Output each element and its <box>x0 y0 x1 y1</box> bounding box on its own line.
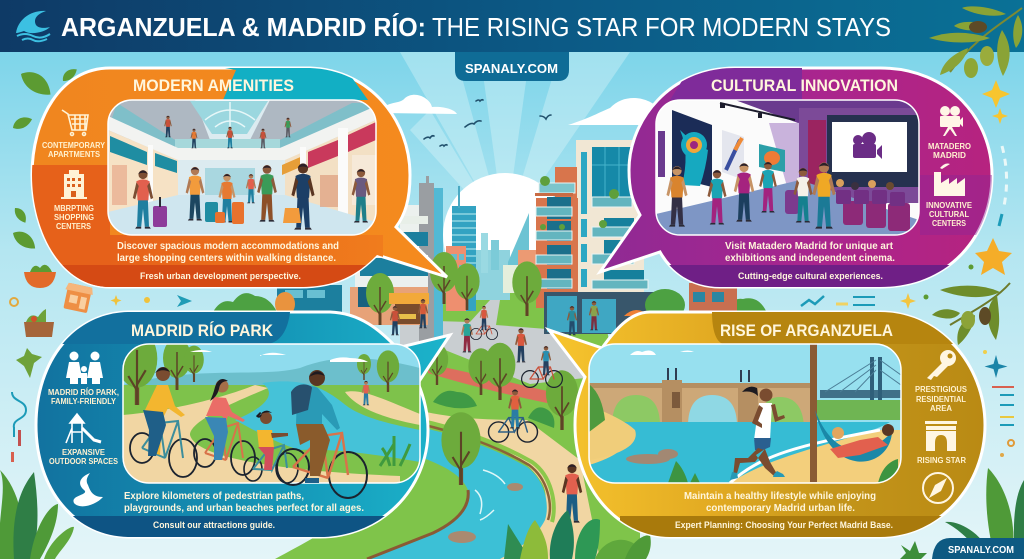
label: innovative cultural centers: INNOVATIVE <box>926 201 973 210</box>
food bowl <box>24 272 56 288</box>
footer note: Consult our attractions guide. <box>153 520 275 531</box>
hedges <box>433 391 554 428</box>
label: shopping centers <box>54 204 94 231</box>
gold sparkles <box>982 80 1010 124</box>
top website badge <box>455 52 569 81</box>
label: contemporary apartments <box>42 141 106 159</box>
footer note: Fresh urban development perspective. <box>140 271 301 282</box>
cyclist two <box>194 379 255 475</box>
bottom website badge: SPANALY.COM <box>948 544 1014 556</box>
tropical plant bottom left <box>0 470 74 559</box>
river <box>367 423 547 559</box>
icon: arch <box>925 421 957 451</box>
blue sparkle and side lines <box>984 355 1008 378</box>
bubble shape <box>36 312 450 537</box>
label: prestigious residential area: PRESTIGIOUS <box>915 385 968 394</box>
city skyline <box>213 176 767 363</box>
plant beside bubble <box>900 541 927 559</box>
bubble shading <box>30 68 390 290</box>
icon: wave logo <box>16 11 50 41</box>
birds <box>424 100 551 146</box>
bubble shape <box>549 312 985 537</box>
description <box>117 241 339 264</box>
label: matadero madrid: MATADERO <box>928 142 971 151</box>
patio umbrella <box>624 310 650 332</box>
description: Discover spacious modern accommodations and <box>117 241 339 252</box>
description: exhibitions and independent cinema. <box>725 253 895 264</box>
label: contemporary apartments: APARTMENTS <box>48 150 101 159</box>
low-rise block behind orange tail <box>400 205 419 250</box>
veggie basket <box>24 309 54 337</box>
gold star <box>975 238 1012 275</box>
description <box>124 491 364 514</box>
label: matadero madrid: MADRID <box>933 151 966 160</box>
sun rays <box>400 52 630 235</box>
left decorations <box>0 66 192 559</box>
label: shopping centers: SHOPPING <box>54 213 94 222</box>
illustration: shopping mall <box>108 100 376 235</box>
icon: family <box>66 352 103 384</box>
panel: modern amenities <box>30 68 447 290</box>
pedestrians and cyclists <box>390 299 599 523</box>
sand path <box>400 405 600 559</box>
label: prestigious residential area: AREA <box>930 404 952 413</box>
foreground plants <box>504 510 651 559</box>
icon: playground <box>66 414 101 443</box>
heading: CULTURAL INNOVATION <box>711 76 898 95</box>
bubble shape <box>600 68 992 287</box>
label: prestigious residential area <box>915 385 968 413</box>
bubble shape <box>32 68 447 287</box>
label: outdoor spaces <box>49 448 119 466</box>
illustration: gallery and cinema <box>656 100 919 235</box>
sun glow <box>443 173 567 297</box>
description <box>684 491 876 514</box>
icon: film camera <box>940 106 963 136</box>
heading: MADRID RÍO PARK <box>131 321 274 340</box>
description: contemporary Madrid urban life. <box>706 503 855 514</box>
bubble shading <box>62 312 385 537</box>
cyclist four <box>277 370 367 498</box>
icon: river <box>73 473 103 506</box>
star leaf <box>16 348 42 378</box>
icon: compass <box>923 473 953 503</box>
icon: shopping cart <box>62 110 88 136</box>
tropical plant bottom right <box>945 468 1024 559</box>
small shapes <box>10 298 18 306</box>
label: family friendly: FAMILY-FRIENDLY <box>51 397 117 406</box>
header band <box>0 0 1024 52</box>
clouds <box>380 95 660 125</box>
bubble shading <box>620 312 985 540</box>
market stall <box>389 293 429 324</box>
title: THE RISING STAR FOR MODERN STAYS <box>432 12 891 42</box>
illustration: bridge, runner, hammock <box>589 344 901 483</box>
label: shopping centers: CENTERS <box>56 222 92 231</box>
footer note: Expert Planning: Choosing Your Perfect Madrid Base. <box>675 520 893 531</box>
title <box>61 12 891 42</box>
footer note: Cutting-edge cultural experiences. <box>738 271 883 282</box>
illustration: family cycling <box>117 330 420 498</box>
top website badge: SPANALY.COM <box>465 62 558 76</box>
description: large shopping centers within walking distance. <box>117 253 336 264</box>
small chart marks <box>801 296 875 306</box>
runner <box>730 387 785 480</box>
label: outdoor spaces: EXPANSIVE <box>62 448 106 457</box>
blue block under orange bubble <box>277 285 342 315</box>
label: innovative cultural centers <box>926 201 973 228</box>
bushes <box>213 293 277 312</box>
panel: rise of arganzuela <box>549 312 985 540</box>
icon: key <box>927 350 956 380</box>
description: Visit Matadero Madrid for unique art <box>725 241 894 252</box>
panel: madrid rio park <box>30 312 450 540</box>
park trees <box>366 252 578 485</box>
dashes <box>1002 146 1007 206</box>
label: matadero madrid <box>928 142 971 160</box>
right decorations <box>801 80 1024 559</box>
heading: RISE OF ARGANZUELA <box>720 321 893 340</box>
description: Explore kilometers of pedestrian paths, <box>124 491 304 502</box>
bottom website badge <box>932 538 1024 559</box>
leaves top left <box>10 66 79 253</box>
label: rising star: RISING STAR <box>917 456 966 465</box>
description: Maintain a healthy lifestyle while enjoying <box>684 491 876 502</box>
label: contemporary apartments: CONTEMPORARY <box>42 141 106 150</box>
icon: factory <box>934 164 965 196</box>
label: shopping centers: MBRPTING <box>54 204 94 213</box>
heading: MODERN AMENITIES <box>133 76 294 95</box>
label: family friendly <box>48 388 119 406</box>
bubble shading <box>660 68 995 290</box>
panel: cultural innovation <box>600 68 995 290</box>
label: outdoor spaces: OUTDOOR SPACES <box>49 457 119 466</box>
icon: building <box>61 170 87 199</box>
cyclist one <box>130 367 197 477</box>
label: innovative cultural centers: CULTURAL <box>929 210 969 219</box>
label: innovative cultural centers: CENTERS <box>932 219 967 228</box>
shop icon <box>61 282 94 314</box>
title: ARGANZUELA & MADRID RÍO: <box>61 12 426 42</box>
park ground <box>275 293 640 559</box>
olive branch over header <box>929 6 1022 78</box>
description: playgrounds, and urban beaches perfect for all ages. <box>124 503 364 514</box>
cyclist three child <box>244 411 298 483</box>
apartment tower <box>535 140 737 334</box>
description <box>725 241 895 264</box>
olive branch lower <box>932 283 1010 345</box>
label: prestigious residential area: RESIDENTIAL <box>916 395 966 404</box>
label: family friendly: MADRID RÍO PARK, <box>48 388 119 397</box>
